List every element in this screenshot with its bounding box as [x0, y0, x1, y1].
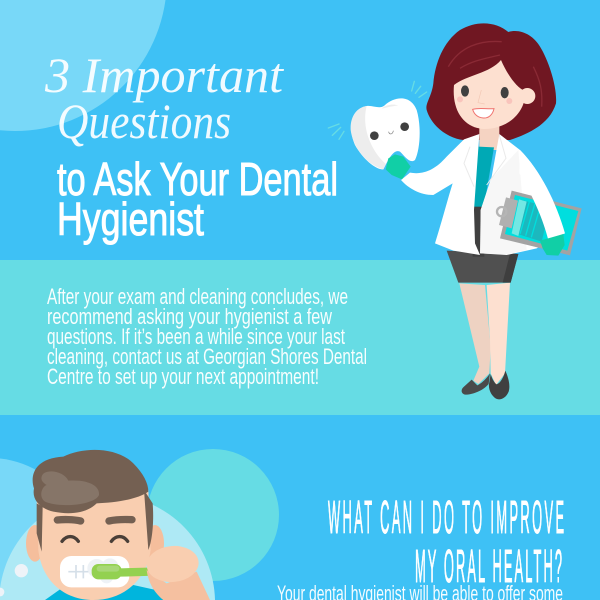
mouth with foam [60, 556, 129, 587]
teal shirt [473, 147, 494, 210]
face [454, 60, 525, 129]
sparkles [328, 81, 427, 139]
sideburns [37, 490, 153, 552]
question heading [328, 492, 564, 593]
intro band [0, 260, 600, 415]
arm [147, 570, 210, 600]
toothbrush [92, 564, 157, 579]
question heading: MY ORAL HEALTH? [415, 541, 562, 593]
ear [519, 88, 535, 104]
skirt [447, 251, 518, 283]
coat sleeve over clipboard [519, 150, 565, 240]
hair highlight [448, 41, 542, 107]
cheeks [457, 96, 512, 104]
shirt [45, 585, 183, 600]
eyebrows [57, 519, 132, 521]
hand [145, 544, 200, 584]
title script line 2: Questions [57, 93, 231, 149]
face [37, 490, 151, 600]
title script line 1: 3 Important [44, 47, 284, 103]
glove on tooth [386, 154, 411, 179]
ears [26, 525, 164, 562]
shoes [462, 371, 509, 399]
hair [33, 450, 148, 513]
teeth lines [68, 565, 88, 578]
title bold line 1: to Ask Your Dental [57, 153, 338, 205]
intro paragraph [47, 284, 367, 389]
smile [473, 108, 494, 118]
title [44, 47, 338, 245]
intro paragraph: After your exam and cleaning concludes, we [47, 284, 348, 309]
intro paragraph: Centre to set up your next appointment! [47, 364, 319, 389]
woman legs and skirt [447, 251, 518, 399]
title bold line 2: Hygienist [57, 193, 204, 245]
question heading: WHAT CAN I DO TO IMPROVE [328, 492, 564, 544]
boy brushing teeth [0, 450, 210, 600]
lab coat [401, 134, 565, 255]
eyes [461, 85, 509, 98]
bottom circles [0, 449, 279, 600]
neck [479, 123, 499, 150]
glove on clipboard [540, 234, 565, 256]
nose [478, 90, 485, 104]
intro paragraph: questions. If it’s been a while since your last [47, 324, 345, 349]
intro paragraph: cleaning, contact us at Georgian Shores Dental [47, 344, 367, 369]
woman upper body [328, 23, 582, 257]
intro paragraph: recommend asking your hygienist a few [47, 304, 332, 329]
hair [426, 23, 556, 140]
decorative circle top left [0, 0, 166, 131]
eyes [62, 537, 128, 541]
coat lapels [464, 135, 506, 187]
skirt centre [473, 207, 484, 257]
tooth [351, 98, 420, 169]
bubbles [0, 564, 28, 596]
clipboard [497, 191, 582, 255]
foam [87, 558, 118, 583]
